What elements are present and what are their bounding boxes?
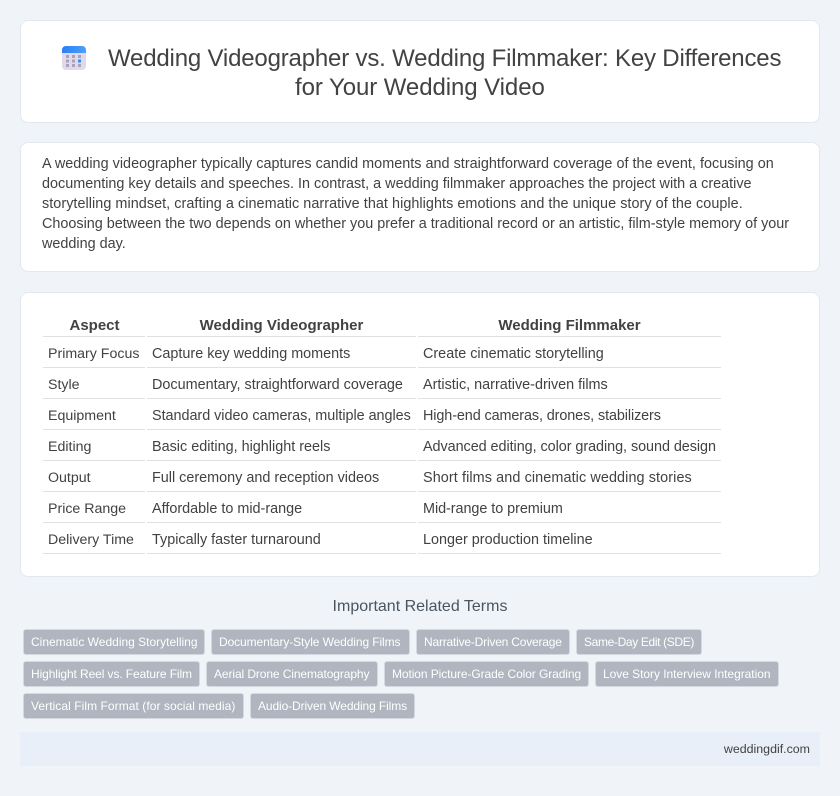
row: Output (48, 470, 692, 486)
tags: related terms: Narrative-Driven Coverage (424, 635, 562, 649)
intro paragraph: A wedding videographer typically captures candid moments and straightforward coverage of the event, focusing on (42, 156, 774, 172)
panel: header (20, 20, 820, 123)
intro paragraph: wedding day. (42, 236, 126, 252)
row: Equipment: Standard video cameras, multiple angles (152, 408, 411, 424)
title (108, 45, 781, 101)
tags: related terms: Audio-Driven Wedding Films (258, 699, 407, 713)
panel: comparison table (20, 292, 820, 577)
intro paragraph: Choosing between the two depends on whether you prefer a traditional record or an artistic, film-style memory of your (42, 216, 789, 232)
row: Editing: Basic editing, highlight reels (152, 439, 330, 455)
footer bar (20, 732, 820, 766)
row: Primary Focus (48, 346, 604, 362)
intro paragraph: documenting key details and speeches. In contrast, a wedding filmmaker approaches the project with a creative (42, 176, 752, 192)
row: Price Range: Price Range (48, 501, 126, 517)
footer: source: weddingdif.com (724, 742, 810, 756)
table header row: Wedding Filmmaker (498, 317, 641, 334)
tags: related terms: Motion Picture-Grade Color Grading (392, 667, 581, 681)
tags: related terms (23, 629, 779, 719)
tags: related terms: Cinematic Wedding Storytelling (31, 635, 198, 649)
intro paragraph (42, 156, 789, 252)
row: Price Range: Affordable to mid-range (152, 501, 302, 517)
row: Equipment: High-end cameras, drones, stabilizers (423, 408, 661, 424)
row: Editing: Editing (48, 439, 91, 455)
title: Wedding Videographer vs. Wedding Filmmaker: Key Differences (108, 45, 781, 72)
tags: related terms: Aerial Drone Cinematography (214, 667, 369, 681)
row: Primary Focus: Create cinematic storytelling (423, 346, 604, 362)
row: Editing (48, 439, 716, 455)
tags: related terms: Highlight Reel vs. Feature Film (31, 667, 192, 681)
row: Delivery Time (48, 532, 593, 548)
row: Style (48, 377, 608, 393)
row: Style: Artistic, narrative-driven films (423, 377, 608, 393)
tags: related terms: Love Story Interview Integration (603, 667, 770, 681)
row: Delivery Time: Delivery Time (48, 532, 134, 548)
tags: related terms: Vertical Film Format (for social media) (31, 699, 235, 713)
panel: intro text (20, 142, 820, 272)
table header row: Aspect (69, 317, 120, 334)
row: Delivery Time: Typically faster turnaround (152, 532, 321, 548)
row: Equipment: Equipment (48, 408, 116, 424)
row: Price Range (48, 501, 563, 517)
row: Output: Output (48, 470, 91, 486)
table header row: Wedding Videographer (200, 317, 363, 334)
table header row (69, 317, 641, 334)
row: Primary Focus: Primary Focus (48, 346, 139, 362)
row: Primary Focus: Capture key wedding moments (152, 346, 350, 362)
title: for Your Wedding Video (295, 74, 545, 101)
row: Output: Short films and cinematic wedding stories (423, 470, 692, 486)
row: Style: Documentary, straightforward coverage (152, 377, 403, 393)
icon: calendar (62, 46, 86, 70)
tags: related terms: Documentary-Style Wedding Films (219, 635, 400, 649)
row: Price Range: Mid-range to premium (423, 501, 563, 517)
row: Style: Style (48, 377, 80, 393)
row: Equipment (48, 408, 661, 424)
row: Delivery Time: Longer production timeline (423, 532, 593, 548)
tags: related terms: Same-Day Edit (SDE) (584, 635, 694, 649)
heading: related terms: Important Related Terms (333, 598, 507, 615)
intro paragraph: storytelling mindset, crafting a cinematic narrative that highlights emotions and the unique story of the couple. (42, 196, 743, 212)
row: Editing: Advanced editing, color grading, sound design (423, 439, 716, 455)
row: Output: Full ceremony and reception videos (152, 470, 379, 486)
